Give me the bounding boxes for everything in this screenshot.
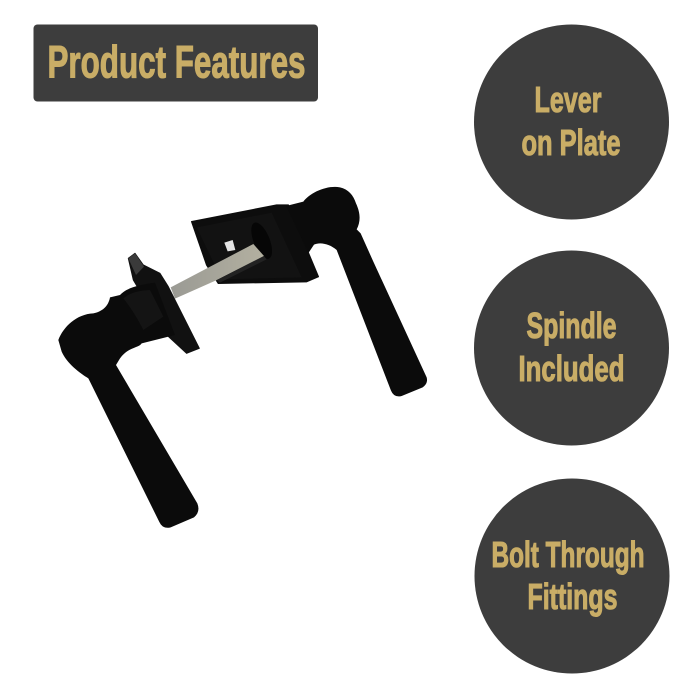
feature badge: Spindle Included: Spindle [526,305,616,346]
heading: Product Features [34,24,318,102]
feature badge: Bolt Through Fittings: Fittings [528,576,618,617]
feature badge: Spindle Included [474,250,669,446]
product photo: black lever door handles with spindle [58,187,427,528]
left backplate [128,253,199,353]
right backplate [192,205,318,283]
feature badge: Spindle Included: Included [518,348,624,389]
feature badge: Lever on Plate [474,24,669,220]
lever highlights [123,290,163,330]
feature badge: Lever on Plate: on Plate [522,122,620,163]
spindle [171,244,267,299]
heading: Product Features: Product Features [48,36,306,88]
right lever [286,187,427,396]
feature badge: Lever on Plate: Lever [534,79,602,120]
left lever [58,283,198,528]
feature badge: Bolt Through Fittings [474,478,670,674]
